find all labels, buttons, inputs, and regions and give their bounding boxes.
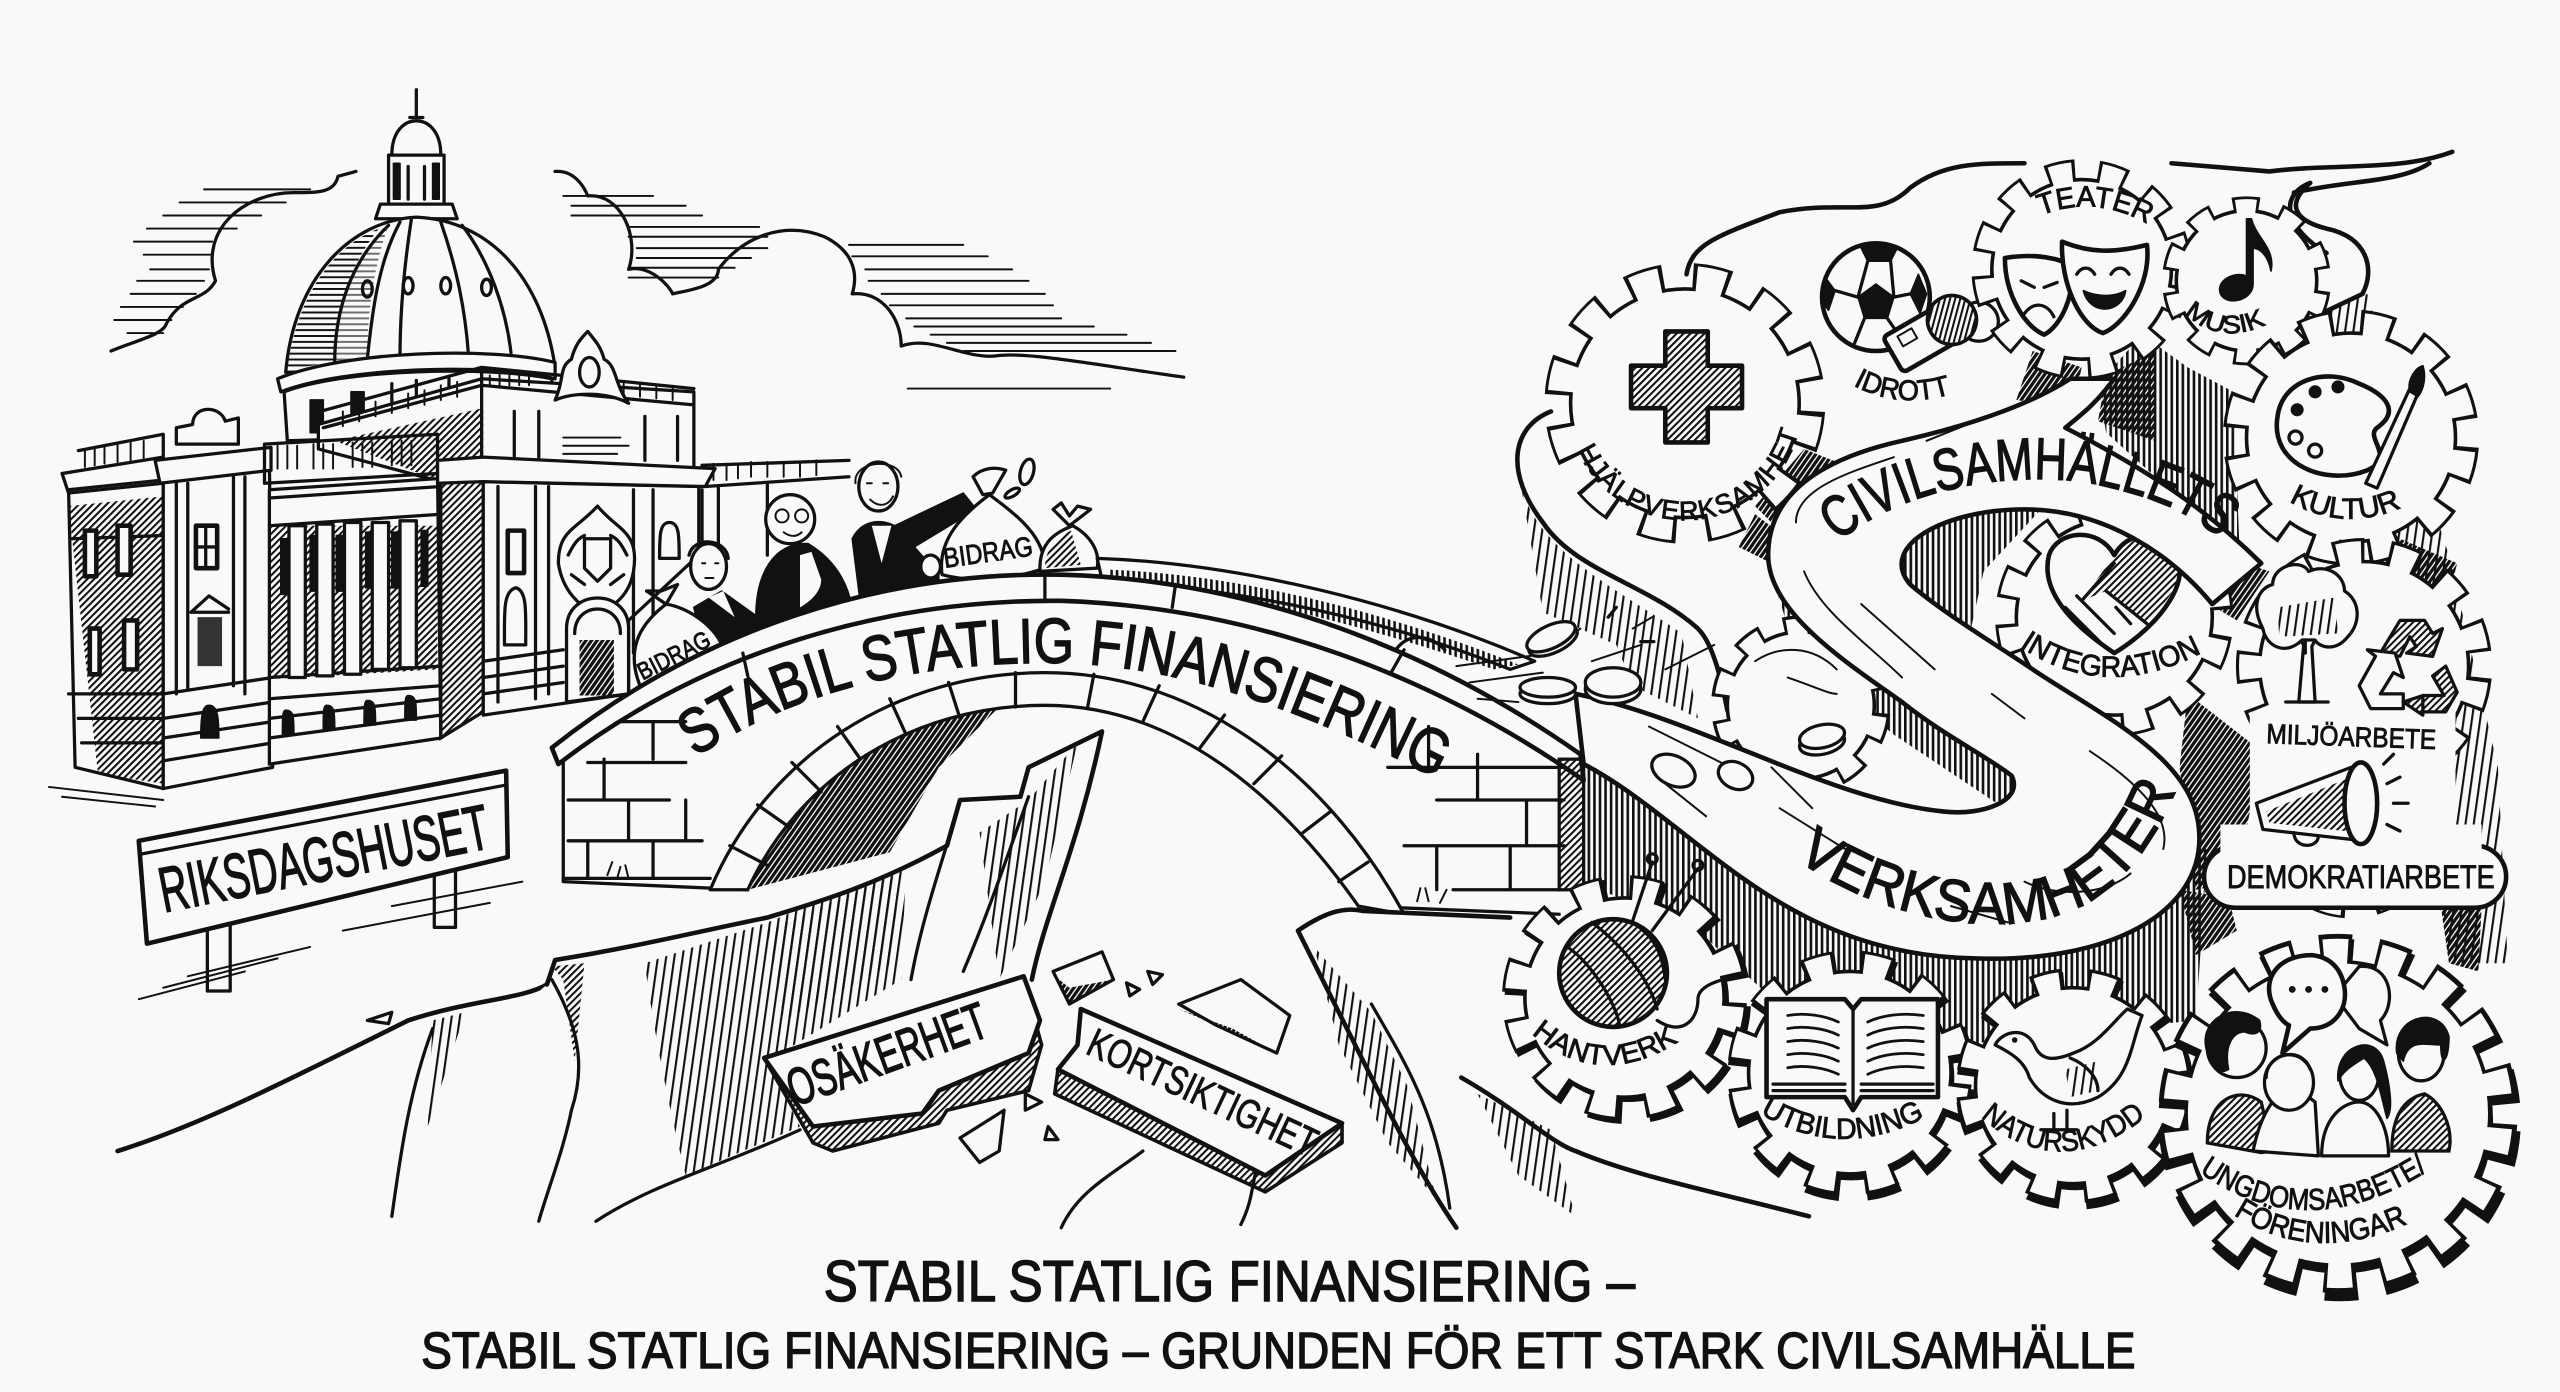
gear label: NATURSKYDD [1982,1102,2142,1152]
icon: bird [1995,1009,2142,1130]
dome [278,217,555,441]
gear: Miljöarbete [2240,542,2488,790]
bridge deck [552,575,1584,780]
icon: megaphone [2256,754,2408,845]
gear label: TEATER [2034,186,2154,224]
gear: Naturskydd [1956,969,2192,1210]
left bulge of ground beside Hjälpverksamhet gear [1517,411,1727,718]
gear label: HANTVERK [1532,1019,1680,1066]
falling stone fragments [960,952,1290,1162]
road label: civilsamhällets: CIVILSAMHÄLLETS [1822,432,2239,536]
shadow under arch [748,707,999,890]
ground lines [49,787,163,807]
gear label: DEMOKRATIARBETE [2227,858,2495,895]
bridge end pier [1559,759,1584,890]
left cliff [118,731,1102,1221]
left side wing [62,434,163,789]
gear label: INTEGRATION [2021,630,2200,678]
road label: verksamheter: VERKSAMHETER [1808,780,2176,925]
arch stones [710,673,1404,914]
icon: group of four people [2205,1012,2450,1156]
gear: Teater [1972,159,2188,378]
gear: Ungdomsarbete / Föreningar [2158,934,2520,1302]
hatching under the road [1580,507,2207,1045]
icon: football [1822,243,1930,351]
building: Riksdagshuset [49,90,849,807]
caption line 2: STABIL STATLIG FINANSIERING – GRUNDEN FÖR ETT STARK CIVILSAMHÄLLE [421,1322,2136,1379]
slab text: KORTSIKTIGHET [1080,1019,1325,1166]
hatched pier [438,473,483,738]
front left block [155,409,273,789]
dark gaps between gears [1739,351,2482,971]
gear label line 1: UNGDOMSARBETE/ [2203,1152,2424,1210]
sign text: RIKSDAGSHUSET [153,792,495,926]
gear label line 2: FÖRENINGAR [2234,1198,2408,1244]
gear: Integration [1995,518,2233,734]
idrott group: ball, whistle and label [1820,241,2038,401]
bag label: BIDRAG [941,531,1035,574]
man left [689,542,767,645]
icon: speech bubbles [2269,955,2389,1053]
bag: large [941,458,1045,580]
brick wall lines [563,722,1567,890]
bridge [550,572,1586,916]
upper landscape cliff behind gears [1687,152,2508,963]
icon: heart and handshake [2047,535,2180,653]
broken slab: Kortsiktighet [1055,1009,1342,1192]
colonnade [264,434,441,764]
icon: palette and brush [2277,366,2424,488]
miljöarbete icons and label [2257,565,2457,755]
gear: Hjälpverksamhet [1544,263,1825,544]
bag: right hatched [1040,503,1098,571]
icon: recycle [2359,620,2457,715]
gear: Demokratiarbete [2204,712,2506,912]
right cliff [1061,910,1809,1228]
man with glasses [756,495,852,633]
icon: whistle [1880,287,1998,375]
right block with portal [438,457,849,715]
sign: Riksdagshuset [139,771,522,999]
coins flowing from bridge [1456,607,1847,795]
broken slab: Osäkerhet [764,976,1042,1151]
gear label: UTBILDNING [1764,1099,1922,1140]
caption line 1: STABIL STATLIG FINANSIERING – [824,1250,1635,1314]
bridge title text: STABIL STATLIG FINANSIERING [678,618,1449,774]
slab text: OSÄKERHET [779,992,995,1118]
upper attic and balustrade [318,331,694,482]
far bridge parapet [1097,558,1535,669]
gear label: HJÄLPVERKSAMHET [1578,426,1798,521]
idrott label: IDROTT [1854,368,1947,401]
icon: music note [2220,219,2272,301]
icon: open book [1767,999,1938,1110]
gear: Kultur [2223,310,2479,564]
road flow lines [1649,408,2165,922]
gear label: KULTUR [2290,484,2402,520]
icon: tree [2257,565,2357,702]
bag: small [633,584,723,686]
dome lantern [376,90,457,219]
S-shaped road [1574,376,2264,961]
icon: yarn and needles [1559,854,1740,1027]
icon: theatre masks [2005,242,2147,335]
small bag label: BIDRAG [633,626,715,686]
gear: Utbildning [1728,950,1974,1201]
clouds with horizontal hatching [111,171,1184,389]
gear: Musik [2162,196,2330,366]
gear label: MILJÖARBETE [2266,718,2437,755]
man lifting bag [852,462,976,604]
people carrying grant bags [633,458,1098,686]
gear: Hantverk [1502,852,1751,1124]
gear beside coin stream [1716,620,1886,791]
gear label: MUSIK [2186,300,2267,334]
icon: cross [1631,331,1742,442]
